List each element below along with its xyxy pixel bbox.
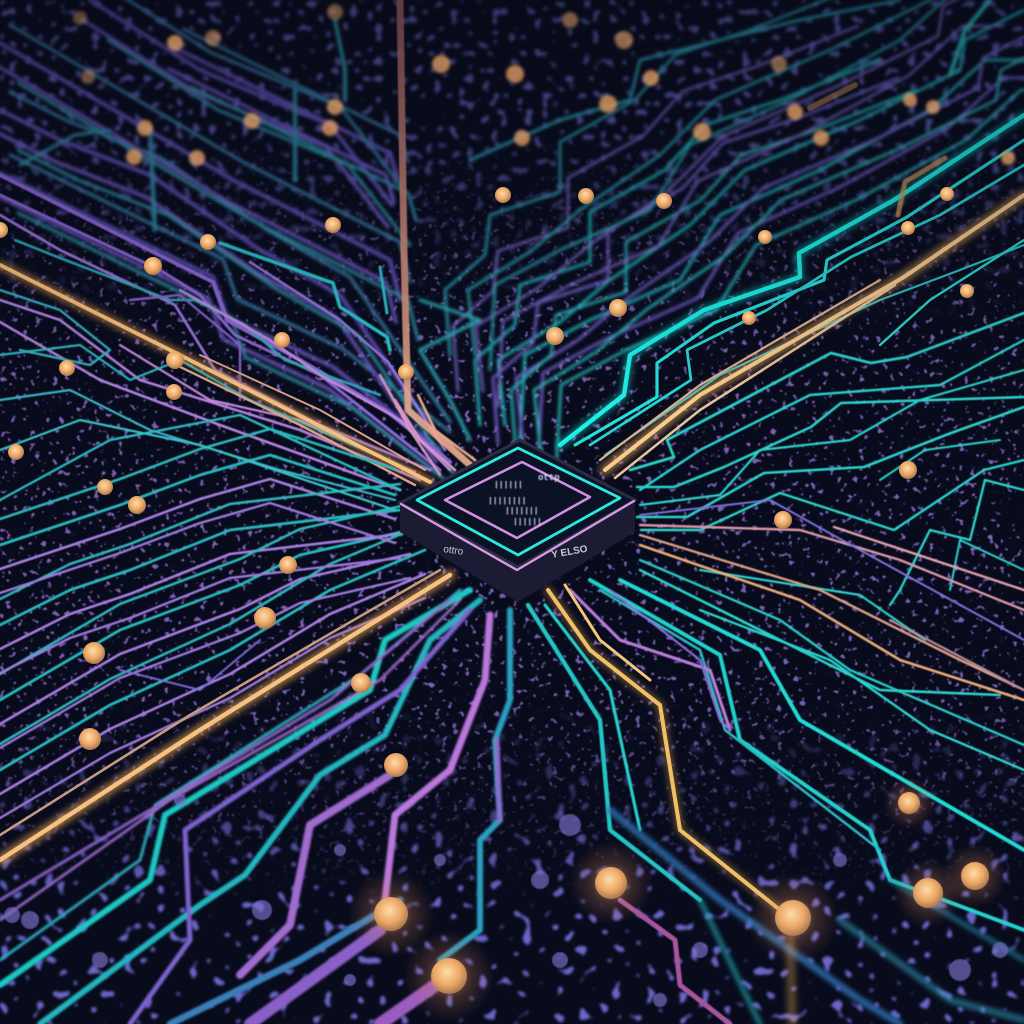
traces: top-left blurred purple fan bbox=[0, 0, 458, 490]
chip top lettering: |||||| bbox=[513, 518, 542, 527]
chip outer cyan square bbox=[417, 448, 620, 555]
chip body bbox=[400, 440, 635, 602]
trace: gold lower-left line bbox=[0, 570, 450, 860]
chip top lettering: ottp bbox=[538, 473, 560, 483]
chip top lettering: |||||||| bbox=[488, 497, 526, 506]
blurred distant nodes bbox=[73, 4, 1015, 166]
traces: top-right teal and purple circuit bundles bbox=[420, 0, 1024, 470]
traces: bright cyan upper right bbox=[560, 115, 1024, 455]
traces: bottom-left foreground lines bbox=[0, 590, 510, 1024]
foreground out-of-focus particles bbox=[4, 794, 1008, 1007]
chip top lettering: ||||||| bbox=[505, 507, 539, 516]
traces: left-side teal and purple bbox=[0, 290, 425, 818]
trace: gold upper-right line bbox=[600, 85, 1024, 478]
traces: bottom-right foreground lines bbox=[528, 500, 1024, 1024]
chip top lettering: |||||| bbox=[494, 481, 523, 490]
trace: gold lower-centre line bbox=[548, 585, 792, 1024]
trace: gold upper-left line bbox=[0, 265, 430, 485]
chip rim bbox=[401, 501, 634, 570]
chip inner pink square bbox=[445, 462, 590, 538]
trace: vertical pink line bbox=[380, 0, 475, 475]
chip side lettering left: ottro bbox=[443, 544, 464, 558]
chip top lettering bbox=[488, 473, 560, 527]
large foreground glowing nodes bbox=[347, 777, 1007, 1022]
chip side lettering right: Y ELSO bbox=[551, 544, 589, 561]
traces: upper-left purple and teal lines bbox=[0, 175, 450, 490]
central microchip bbox=[400, 440, 635, 602]
traces: right-side teal stepped lines bbox=[630, 313, 1024, 770]
small glowing nodes bbox=[0, 187, 974, 777]
traces: bottom-right blurred blue lines bbox=[610, 810, 1024, 1024]
